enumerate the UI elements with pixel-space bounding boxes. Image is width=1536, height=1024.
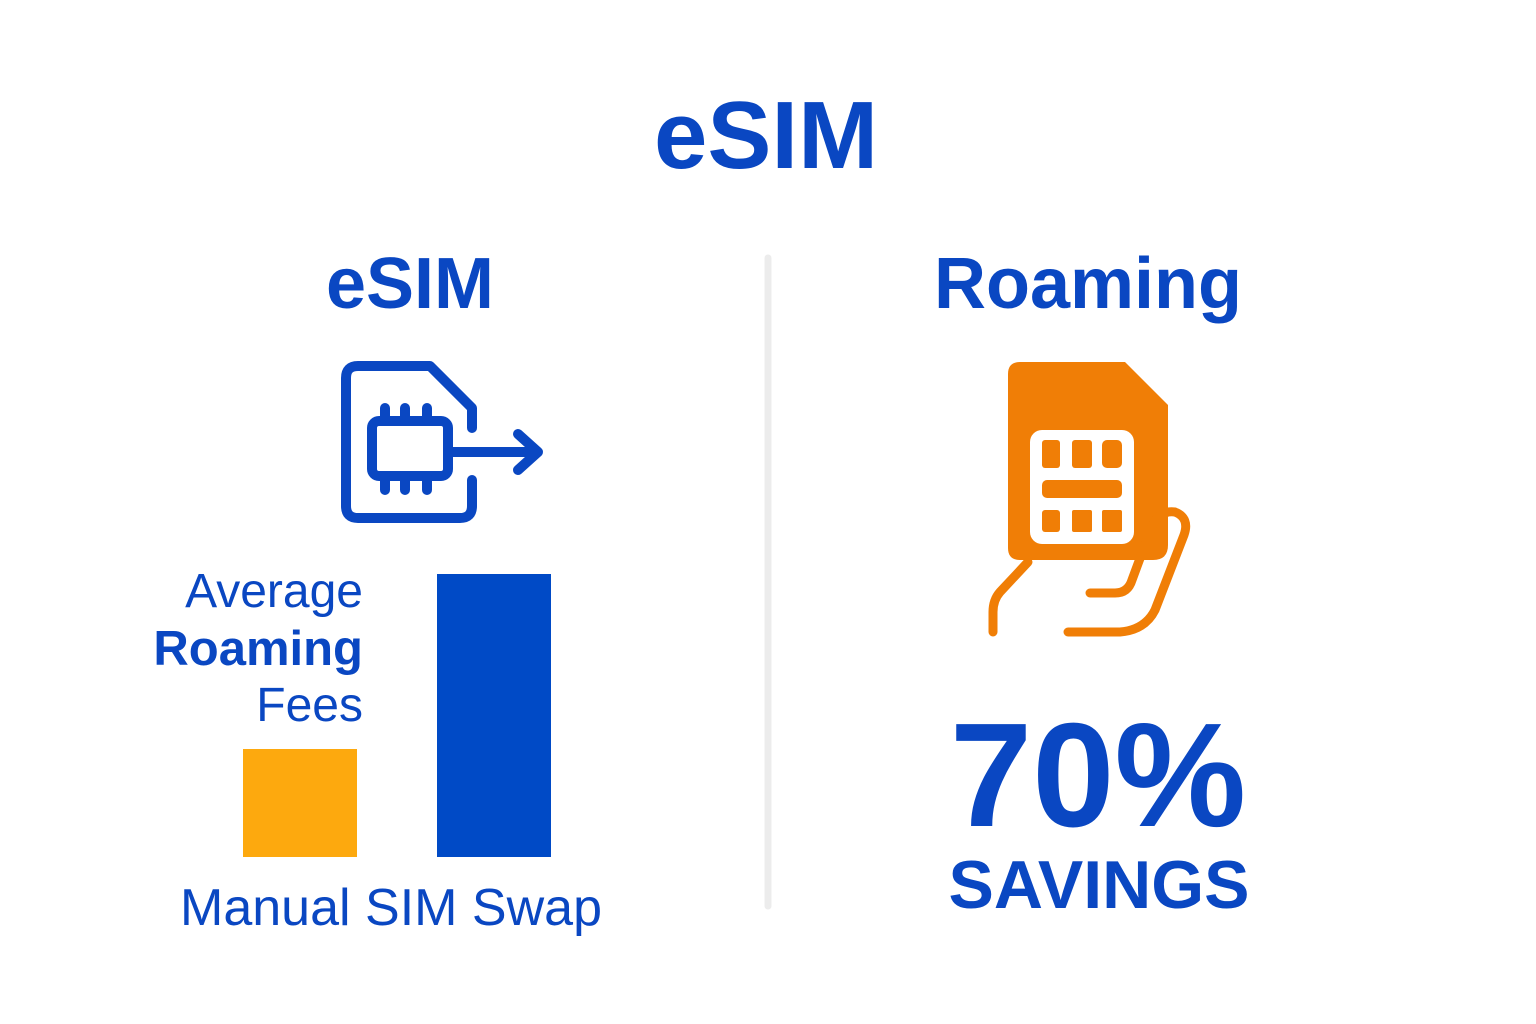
label: manual sim swap: Manual SIM Swap bbox=[180, 879, 602, 937]
bar chart bbox=[243, 574, 551, 857]
title: eSIM bbox=[654, 82, 878, 189]
panel: roaming bbox=[934, 244, 1250, 923]
label: average roaming fees bbox=[153, 565, 363, 732]
label: average roaming fees: Roaming bbox=[153, 622, 363, 676]
divider bbox=[764, 258, 772, 906]
icon: sim in hand bbox=[993, 362, 1186, 632]
label: savings: SAVINGS bbox=[948, 847, 1250, 923]
icon: esim card with arrow bbox=[346, 366, 538, 518]
label: average roaming fees: Fees bbox=[256, 679, 363, 732]
stat: 70%: 70% bbox=[950, 693, 1246, 858]
heading: roaming: Roaming bbox=[934, 244, 1242, 324]
label: average roaming fees: Average bbox=[185, 565, 363, 618]
panel: esim bbox=[153, 244, 602, 937]
heading: esim: eSIM bbox=[326, 244, 494, 324]
